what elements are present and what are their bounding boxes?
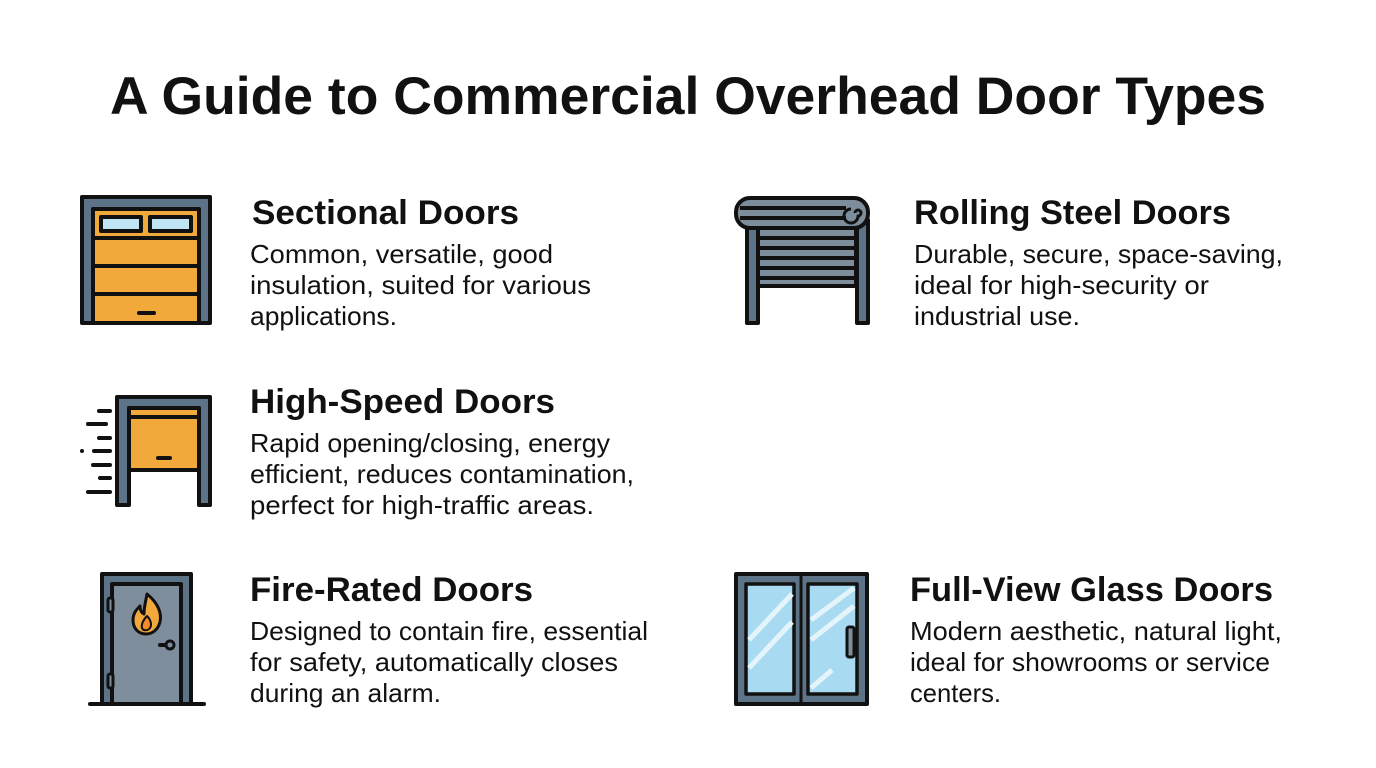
text: high-speed: Rapid opening/closing, energy: [250, 428, 610, 458]
icon: rolling steel door: [736, 198, 868, 323]
text: sectional: [250, 239, 591, 331]
text: full-view: centers.: [910, 678, 1001, 708]
text: fire-rated: [250, 616, 648, 708]
icon: full-view glass door: [736, 574, 867, 704]
text: sectional: Common, versatile, good: [250, 239, 553, 269]
text: fire-rated: Designed to contain fire, essential: [250, 616, 648, 646]
title: A Guide to Commercial Overhead Door Types: [110, 67, 1266, 126]
icon: fire-rated door: [90, 574, 204, 704]
text: high-speed: perfect for high-traffic areas.: [250, 490, 594, 520]
heading: fire-rated: Fire-Rated Doors: [250, 571, 533, 609]
text: fire-rated: during an alarm.: [250, 678, 441, 708]
text: full-view: Modern aesthetic, natural light,: [910, 616, 1282, 646]
heading: rolling: Rolling Steel Doors: [914, 194, 1231, 232]
text: full-view: [910, 616, 1282, 708]
heading: high-speed: High-Speed Doors: [250, 383, 555, 421]
text: sectional: applications.: [250, 301, 397, 331]
icon: high-speed door: [82, 397, 210, 505]
icon: sectional door: [82, 197, 210, 323]
text: rolling: Durable, secure, space-saving,: [914, 239, 1283, 269]
heading: full-view: Full-View Glass Doors: [910, 571, 1273, 609]
text: sectional: insulation, suited for various: [250, 270, 591, 300]
text: rolling: [914, 239, 1283, 331]
text: high-speed: efficient, reduces contamination,: [250, 459, 634, 489]
text: high-speed: [250, 428, 634, 520]
text: full-view: ideal for showrooms or service: [910, 647, 1270, 677]
text: fire-rated: for safety, automatically closes: [250, 647, 618, 677]
text: rolling: industrial use.: [914, 301, 1080, 331]
heading: sectional: Sectional Doors: [252, 194, 519, 232]
text: rolling: ideal for high-security or: [914, 270, 1209, 300]
